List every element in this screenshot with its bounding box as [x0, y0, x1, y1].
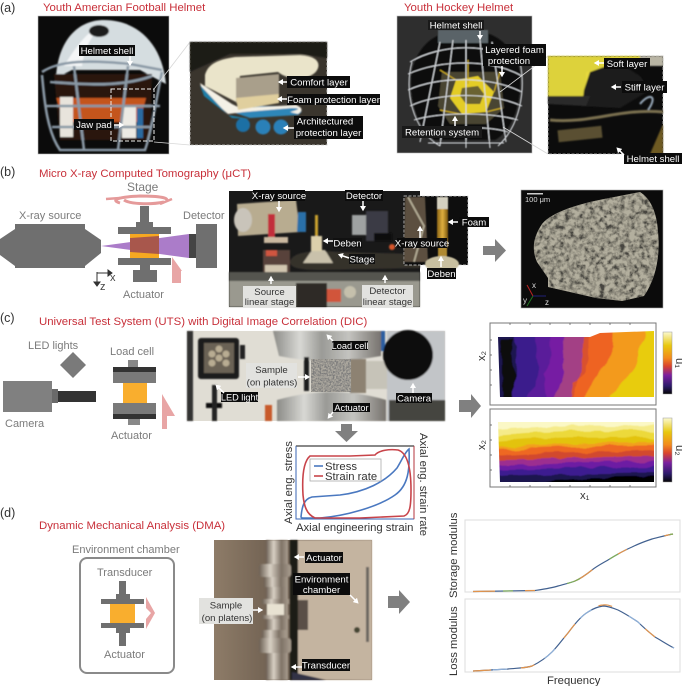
schematic: micro CT: x: [110, 272, 116, 284]
label: architectured protection layer: Architectured: [297, 116, 353, 128]
actuator motion arrow: [162, 394, 175, 429]
schematic: UTS: Load cell: [110, 346, 154, 358]
legend: Stress: [325, 461, 357, 473]
schematic: micro CT: Detector: [183, 210, 225, 222]
heading: hockey helmet: Youth Hockey Helmet: [404, 2, 514, 14]
legend: [310, 459, 381, 483]
label: DMA actuator: Actuator: [306, 553, 343, 564]
image: CT foam volume: 100 μm: [525, 195, 550, 204]
label: DMA environment chamber: chamber: [303, 585, 341, 596]
label: detector: Detector: [346, 191, 383, 202]
photo: hockey helmet: [397, 16, 532, 153]
schematic: UTS: LED lights: [28, 340, 79, 352]
heading: football helmet: Youth Amercian Football Helmet: [43, 2, 206, 14]
label: DMA transducer: Transducer: [302, 660, 351, 672]
label: DMA environment chamber: Environment: [295, 574, 349, 586]
label: LED light: LED light: [221, 392, 259, 402]
label: LED light: [217, 386, 259, 402]
photo: micro CT setup: [229, 191, 468, 307]
label: source linear stage: linear stage: [245, 297, 294, 308]
label: sample on platens: (on platens): [247, 378, 297, 388]
heading: DMA: Dynamic Mechanical Analysis (DMA): [39, 520, 225, 532]
legend: Strain rate: [325, 471, 377, 483]
label: actuator: Actuator: [334, 403, 369, 413]
label: foam: [450, 217, 489, 228]
environment chamber: [80, 558, 174, 673]
image: CT foam volume: [521, 190, 663, 308]
label: camera: [396, 385, 432, 404]
arrow to modulus plots: [388, 590, 410, 614]
chart: storage modulus: Storage modulus: [448, 512, 460, 598]
photo: hockey layer inset: [548, 56, 663, 154]
x-ray source: [0, 224, 101, 268]
panel label (d): (d): [0, 506, 15, 520]
label: jaw pad: [74, 119, 122, 131]
colorbar: u1: [663, 332, 685, 394]
label: load cell: Load cell: [332, 341, 368, 351]
label: architectured protection layer: protection layer: [296, 128, 362, 139]
chart: storage modulus: [448, 512, 680, 598]
photo: UTS setup: [187, 330, 445, 421]
label: stage: Stage: [349, 254, 375, 266]
colorbar: u1: u₁: [673, 358, 685, 368]
label: foam: Foam: [462, 218, 486, 228]
schematic: DMA: [72, 544, 180, 673]
image: CT foam volume: z: [545, 298, 549, 307]
schematic: UTS: Actuator: [111, 430, 152, 442]
label: detector: [345, 190, 383, 209]
chart: u1 contour map: x₂: [476, 351, 488, 361]
chart: stress and strain rate: Axial eng. strain rate: [417, 433, 429, 536]
x-ray beam: [101, 234, 189, 258]
arrow to DIC maps: [459, 394, 481, 418]
label: jaw pad: Jaw pad: [76, 120, 112, 131]
chart: u2 contour map: x₂: [476, 440, 488, 450]
label: detector linear stage: [362, 277, 413, 308]
label: soft layer: [596, 58, 650, 70]
label: stiff layer: Stiff layer: [625, 82, 665, 94]
arrow down to stress plot: [335, 424, 358, 442]
label: source linear stage: [243, 278, 296, 308]
label: architectured protection layer: [285, 116, 363, 139]
label: sample on platens: Sample: [255, 365, 288, 376]
chart: u1 contour map: [476, 323, 660, 405]
label: inset helmet shell: [618, 149, 682, 165]
panel label (c): (c): [0, 311, 15, 325]
label: hockey helmet shell: Helmet shell: [430, 20, 482, 32]
label: retention system: [402, 118, 482, 138]
chart: loss modulus: [448, 599, 680, 686]
panel label (b): (b): [0, 165, 15, 179]
photo: football helmet: [38, 16, 169, 154]
label: hockey helmet shell: [428, 20, 484, 38]
image: CT foam volume: x: [532, 281, 536, 290]
colorbar: u2: [663, 418, 685, 482]
colorbar: u2: u₂: [673, 445, 685, 456]
schematic: DMA: Environment chamber: [72, 544, 180, 556]
label: DMA sample: [199, 598, 261, 624]
label: actuator: [329, 403, 370, 417]
actuator motion arrow: [172, 257, 182, 283]
chart: stress and strain rate: [283, 433, 429, 536]
photo: DMA setup: [214, 540, 372, 680]
label: stage: [340, 254, 375, 266]
test column: [101, 581, 144, 646]
label: inset x-ray source: X-ray source: [395, 238, 449, 250]
label: detector linear stage: linear stage: [363, 297, 412, 308]
chart: u2 contour map: [476, 409, 660, 502]
heading: micro CT: Micro X-ray Computed Tomography (μCT): [39, 168, 251, 180]
chart: stress and strain rate: Axial engineering strain: [296, 522, 413, 534]
label: DMA actuator: [296, 552, 343, 564]
chart: u2 contour map: x₁: [580, 490, 590, 502]
schematic: micro CT: X-ray source: [19, 210, 81, 222]
label: load cell: [328, 336, 368, 351]
LED light: [60, 352, 86, 378]
label: inset x-ray source: [395, 228, 449, 250]
load frame: [113, 360, 156, 425]
schematic: UTS: Camera: [5, 418, 45, 430]
photo: jaw pad inset: [190, 42, 327, 145]
arrow to CT volume: [483, 239, 506, 262]
stress curve: [301, 449, 409, 518]
label: football helmet shell: [79, 45, 135, 64]
label: inset deben: [427, 258, 456, 280]
strain rate curve: [303, 450, 411, 518]
schematic: micro CT: [0, 180, 225, 301]
image: CT foam volume: y: [523, 296, 527, 305]
schematic: micro CT: Stage: [127, 180, 159, 194]
schematic: micro CT: Actuator: [123, 289, 164, 301]
label: foam protection layer: Foam protection layer: [287, 95, 381, 106]
schematic: DMA: Actuator: [104, 649, 145, 661]
label: sample on platens: [246, 363, 308, 388]
schematic: micro CT: z: [100, 281, 106, 293]
label: layered foam protection: protection: [488, 56, 530, 67]
label: camera: Camera: [397, 394, 432, 404]
stage column: [118, 206, 171, 282]
label: layered foam protection: [483, 44, 546, 75]
label: football helmet shell: Helmet shell: [81, 46, 133, 57]
sample: [130, 234, 159, 258]
label: inset deben: Deben: [427, 269, 456, 280]
zoom guide lines: [500, 56, 548, 154]
detector: [189, 224, 217, 268]
camera: [3, 381, 96, 412]
label: stiff layer: [613, 81, 667, 94]
label: deben: Deben: [333, 238, 362, 250]
label: DMA sample: (on platens): [202, 613, 252, 624]
label: soft layer: Soft layer: [607, 59, 648, 70]
schematic: DMA: Transducer: [97, 567, 153, 579]
label: retention system: Retention system: [405, 128, 479, 138]
label: DMA environment chamber: [293, 573, 357, 602]
chart: stress and strain rate: Axial eng. stress: [283, 441, 295, 524]
panel label (a): (a): [0, 1, 15, 15]
label: inset helmet shell: Helmet shell: [627, 154, 679, 165]
label: DMA sample: Sample: [210, 600, 242, 612]
heading: UTS with DIC: Universal Test System (UTS) with Digital Image Correlation (DIC): [39, 316, 368, 328]
axes: [94, 270, 112, 286]
rotation arrow: [106, 196, 172, 204]
schematic: UTS: [3, 340, 175, 442]
label: x-ray source: X-ray source: [252, 191, 306, 202]
label: source linear stage: Source: [254, 287, 285, 298]
label: layered foam protection: Layered foam: [485, 45, 544, 56]
zoom guide lines: [154, 42, 190, 145]
chart: loss modulus: Loss modulus: [448, 606, 460, 676]
label: comfort layer: Comfort layer: [290, 78, 349, 88]
label: x-ray source: [252, 190, 306, 210]
label: detector linear stage: Detector: [369, 286, 406, 297]
oscillation arrow: [146, 597, 155, 629]
